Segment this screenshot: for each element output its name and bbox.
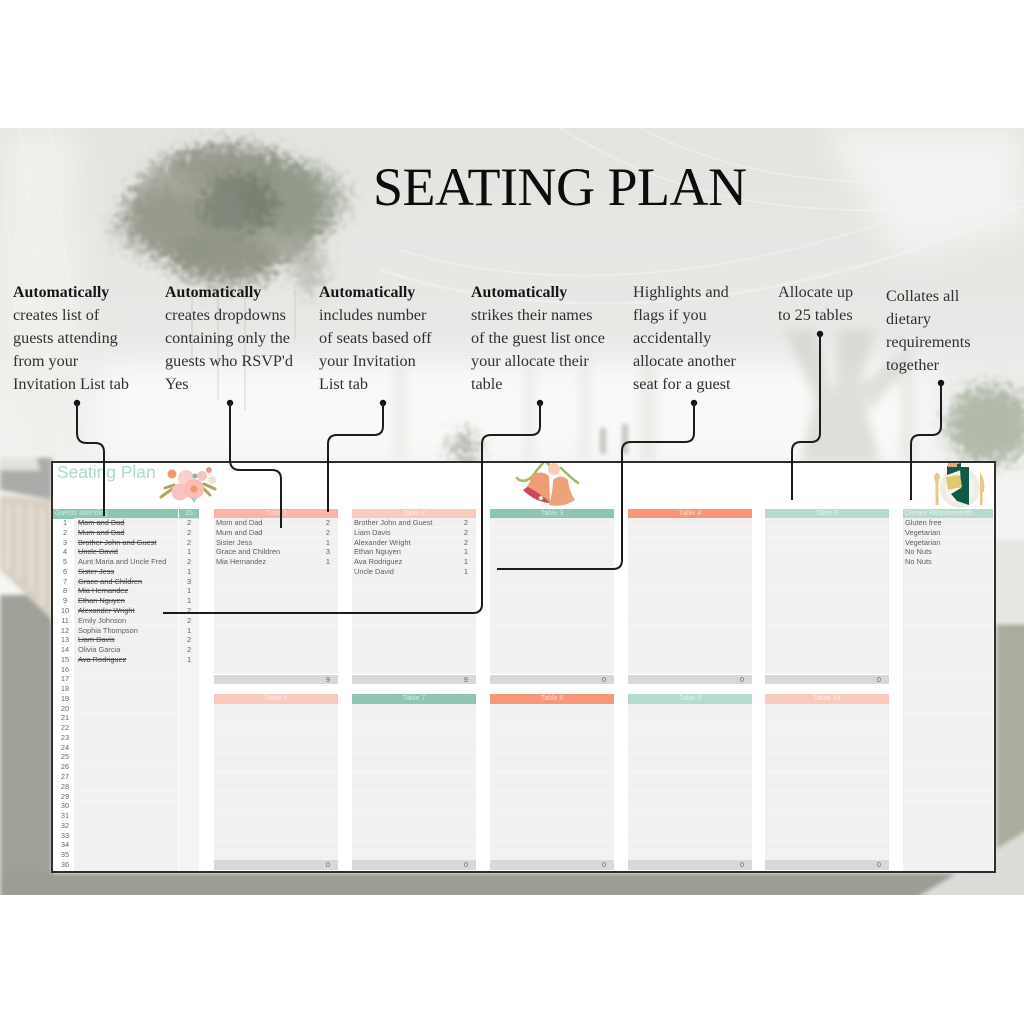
table 2 guests: Brother John and Guest: [354, 518, 432, 527]
table 2 seats: [464, 518, 468, 576]
table 2 seats: 2: [464, 528, 468, 537]
text block: guest list feature: Automatically: [13, 284, 109, 301]
text block: dropdowns feature: containing only the: [165, 329, 290, 347]
guest names: Emily Johnson: [78, 616, 126, 625]
table 1: [214, 509, 338, 684]
table 1 total: [214, 674, 338, 684]
table 2 seats: 1: [464, 547, 468, 556]
guest names: Ethan Nguyen: [78, 596, 125, 605]
text block: guest list feature: Invitation List tab: [13, 375, 129, 393]
text block: dropdowns feature: Yes: [165, 375, 189, 393]
table 1 seats: 2: [326, 518, 330, 527]
text block: number of seats feature: Automatically: [319, 284, 415, 301]
dietary list: Gluten free: [905, 518, 942, 527]
table 1 header: [214, 509, 338, 518]
table 5 total: [765, 674, 889, 684]
arrow: tables: [792, 331, 823, 500]
table 2 guests: Liam Davis: [354, 528, 391, 537]
text block: table allocation feature: Allocate up: [778, 283, 853, 301]
row numbers: 6: [63, 567, 67, 576]
text block: dropdowns feature: Automatically: [165, 284, 261, 301]
table 1 guests: Sister Jess: [216, 538, 252, 547]
table 2 guests: Uncle David: [354, 567, 394, 576]
row numbers: 30: [61, 801, 69, 810]
guest seat counts: 1: [187, 626, 191, 635]
guest names: Liam Davis: [78, 635, 115, 644]
table 1 seats: 1: [326, 557, 330, 566]
dietary header: [903, 509, 993, 518]
row numbers: 4: [63, 547, 67, 556]
dietary list: No Nuts: [905, 547, 932, 556]
row numbers: 26: [61, 762, 69, 771]
table 6: [214, 694, 338, 870]
table 9 total: [628, 860, 752, 870]
guest seat counts: 1: [187, 567, 191, 576]
text block: strike-through feature: your allocate their: [471, 352, 589, 370]
row numbers: 29: [61, 792, 69, 801]
row numbers: 11: [61, 616, 69, 625]
table 2 guests: [354, 518, 432, 576]
table 2 total: 9: [464, 674, 468, 684]
row numbers: 8: [63, 586, 67, 595]
table 2 guests: Alexander Wright: [354, 538, 411, 547]
text block: duplicate flag feature: allocate another: [633, 352, 736, 370]
text block: strike-through feature: of the guest list once: [471, 329, 605, 347]
text block: duplicate flag feature: [633, 283, 736, 393]
table 3 total: [490, 674, 614, 684]
table 7: [352, 694, 476, 870]
row numbers: 15: [61, 655, 69, 664]
text block: duplicate flag feature: Highlights and: [633, 283, 729, 301]
guests header: [53, 509, 178, 518]
table 2 seats: 2: [464, 518, 468, 527]
row numbers: 28: [61, 782, 69, 791]
row numbers: 31: [61, 811, 69, 820]
text block: dietary feature: together: [886, 356, 939, 374]
row numbers: 2: [63, 528, 67, 537]
spreadsheet heading: Seating Plan: [57, 462, 156, 482]
row numbers: 35: [61, 850, 69, 859]
text block: number of seats feature: your Invitation: [319, 352, 416, 370]
table 7 total: 0: [464, 860, 468, 869]
table 1 guests: Grace and Children: [216, 547, 280, 556]
arrow: seats: [328, 400, 386, 512]
table 10 total: [765, 860, 889, 870]
table 3 header: [490, 509, 614, 518]
guest seat counts: 2: [187, 518, 191, 527]
row numbers: 1: [63, 518, 67, 527]
table 2: [352, 509, 476, 684]
table 2 total: [352, 674, 476, 684]
text block: duplicate flag feature: flags if you: [633, 306, 707, 324]
row numbers: 36: [61, 860, 69, 869]
text block: guest list feature: creates list of: [13, 306, 99, 324]
table 10: [765, 694, 889, 870]
table 4: [628, 509, 752, 684]
row numbers: 17: [61, 674, 69, 683]
text block: guest list feature: [13, 284, 129, 393]
guest names: Uncle David: [78, 547, 118, 556]
table 2 seats: 1: [464, 567, 468, 576]
row numbers: 5: [63, 557, 67, 566]
row numbers: 25: [61, 752, 69, 761]
text block: number of seats feature: List tab: [319, 375, 368, 393]
text block: strike-through feature: strikes their names: [471, 306, 592, 324]
row numbers: 19: [61, 694, 69, 703]
table 5: [765, 509, 889, 684]
guest names: Mum and Dad: [78, 528, 124, 537]
row numbers: 33: [61, 831, 69, 840]
table 9: [628, 694, 752, 870]
guest seat counts: 1: [187, 655, 191, 664]
guest names: Ava Rodriguez: [78, 655, 126, 664]
table 1 guests: Mom and Dad: [216, 518, 262, 527]
table 6 total: 0: [326, 860, 330, 869]
table 8 header: [490, 694, 614, 704]
icon: wedding bells: [516, 463, 580, 506]
table 7 header: [352, 694, 476, 704]
table 8 header: Table 8: [541, 695, 563, 702]
dietary list: Vegetarian: [905, 528, 940, 537]
guest seat counts: 1: [187, 586, 191, 595]
guest names: Mia Hernandez: [78, 586, 128, 595]
row numbers: 7: [63, 577, 67, 586]
table 4 header: Table 4: [679, 510, 701, 517]
table 3 total: 0: [602, 674, 606, 684]
dietary requirements column: [903, 509, 993, 871]
table 4 total: 0: [740, 674, 744, 684]
guest seat counts: 2: [187, 528, 191, 537]
guest seat counts: 2: [187, 557, 191, 566]
table 1 guests: Mia Hernandez: [216, 557, 266, 566]
text block: dietary feature: requirements: [886, 332, 971, 350]
arrow: dropdowns: [227, 400, 281, 528]
table 4 total: [628, 674, 752, 684]
text block: dietary feature: [886, 286, 971, 374]
table 2 header: Table 2: [403, 510, 425, 517]
text block: number of seats feature: [319, 284, 432, 393]
icon: flower bouquet: [159, 467, 216, 503]
table 1 total: 9: [326, 674, 330, 684]
arrow: duplicate flag: [497, 400, 697, 569]
guest seat counts: 2: [187, 645, 191, 654]
table 8: [490, 694, 614, 870]
table 3 header: Table 3: [541, 510, 563, 517]
title: SEATING PLAN: [373, 157, 747, 217]
table 7 total: [352, 860, 476, 870]
table 8 total: [490, 860, 614, 870]
text block: duplicate flag feature: accidentally: [633, 329, 711, 347]
text block: dropdowns feature: guests who RSVP'd: [165, 352, 293, 370]
arrow: dietary: [911, 380, 944, 500]
guest list column: [53, 509, 199, 873]
guest seat counts: 2: [187, 635, 191, 644]
dietary list: [905, 518, 942, 566]
text block: table allocation feature: to 25 tables: [778, 306, 853, 324]
guest names: Grace and Children: [78, 577, 142, 586]
text block: dropdowns feature: creates dropdowns: [165, 306, 286, 324]
table 8 total: 0: [602, 860, 606, 869]
text block: dropdowns feature: [165, 284, 293, 393]
background photo: wedding marquee: [0, 128, 1024, 895]
guests header: Guests attending: [55, 510, 108, 517]
text block: dietary feature: dietary: [886, 310, 931, 328]
text block: strike-through feature: [471, 284, 605, 393]
arrow: strike-through: [163, 400, 543, 613]
guest seat counts: 2: [187, 606, 191, 615]
guest names: Sophia Thompson: [78, 626, 138, 635]
row numbers: 9: [63, 596, 67, 605]
table 6 header: Table 6: [265, 695, 287, 702]
row numbers: 13: [61, 635, 69, 644]
table 6 header: [214, 694, 338, 704]
dietary list: Vegetarian: [905, 538, 940, 547]
text block: strike-through feature: Automatically: [471, 284, 567, 301]
table 5 total: 0: [877, 674, 881, 684]
row numbers: 21: [61, 713, 69, 722]
arrow: guest list: [74, 400, 104, 516]
guest names: Aunt Maria and Uncle Fred: [78, 557, 166, 566]
guest names: Olivia Garcia: [78, 645, 120, 654]
panel: seating plan spreadsheet: [51, 461, 996, 873]
row numbers: [61, 518, 69, 873]
table 2 guests: Ethan Nguyen: [354, 547, 401, 556]
icon: plate with cutlery and napkin: [934, 463, 984, 508]
row numbers: 10: [61, 606, 69, 615]
guests total: 25: [185, 510, 193, 517]
table 10 total: 0: [877, 860, 881, 869]
table 2 seats: 1: [464, 557, 468, 566]
table 1 seats: 3: [326, 547, 330, 556]
text block: duplicate flag feature: seat for a guest: [633, 375, 731, 393]
row numbers: 32: [61, 821, 69, 830]
table 4 header: [628, 509, 752, 518]
row numbers: 20: [61, 704, 69, 713]
table 1 guests: Mum and Dad: [216, 528, 262, 537]
table 6 total: [214, 860, 338, 870]
guest names: Brother John and Guest: [78, 538, 156, 547]
guest seat counts: 1: [187, 596, 191, 605]
table 10 header: Table 10: [814, 695, 840, 702]
guest names: Alexander Wright: [78, 606, 135, 615]
row numbers: 24: [61, 743, 69, 752]
table 2 header: [352, 509, 476, 518]
table 7 header: Table 7: [403, 695, 425, 702]
table 1 header: Table 1: [265, 510, 287, 517]
table 9 header: [628, 694, 752, 704]
text block: guest list feature: from your: [13, 352, 78, 370]
row numbers: 3: [63, 538, 67, 547]
row numbers: 14: [61, 645, 69, 654]
dietary list: No Nuts: [905, 557, 932, 566]
text block: number of seats feature: includes number: [319, 306, 426, 324]
guest seat counts: 1: [187, 547, 191, 556]
row numbers: 22: [61, 723, 69, 732]
guest seat counts: 2: [187, 538, 191, 547]
guest seat counts: [187, 518, 191, 664]
guest seat counts: 2: [187, 616, 191, 625]
table 2 seats: 2: [464, 538, 468, 547]
table 10 header: [765, 694, 889, 704]
row numbers: 27: [61, 772, 69, 781]
text block: table allocation feature: [778, 283, 853, 324]
text block: guest list feature: guests attending: [13, 329, 118, 347]
guest names: Mom and Dad: [78, 518, 124, 527]
row numbers: 23: [61, 733, 69, 742]
table 1 guests: [216, 518, 280, 566]
table 5 header: Table 5: [816, 510, 838, 517]
guest seat counts: 3: [187, 577, 191, 586]
table 2 guests: Ava Rodriguez: [354, 557, 402, 566]
text block: number of seats feature: of seats based off: [319, 329, 432, 347]
text block: strike-through feature: table: [471, 375, 502, 393]
row numbers: 18: [61, 684, 69, 693]
table 1 seats: [326, 518, 330, 566]
table 1 seats: 1: [326, 538, 330, 547]
table 5 header: [765, 509, 889, 518]
row numbers: 16: [61, 665, 69, 674]
row numbers: 12: [61, 626, 69, 635]
guest names: Sister Jess: [78, 567, 114, 576]
row numbers: 34: [61, 840, 69, 849]
table 9 header: Table 9: [679, 695, 701, 702]
table 3: [490, 509, 614, 684]
guest names: [78, 518, 166, 664]
text block: dietary feature: Collates all: [886, 286, 959, 304]
guests total: [179, 509, 199, 518]
dietary header: Dietary Requirements: [905, 510, 973, 517]
table 1 seats: 2: [326, 528, 330, 537]
table 9 total: 0: [740, 860, 744, 869]
